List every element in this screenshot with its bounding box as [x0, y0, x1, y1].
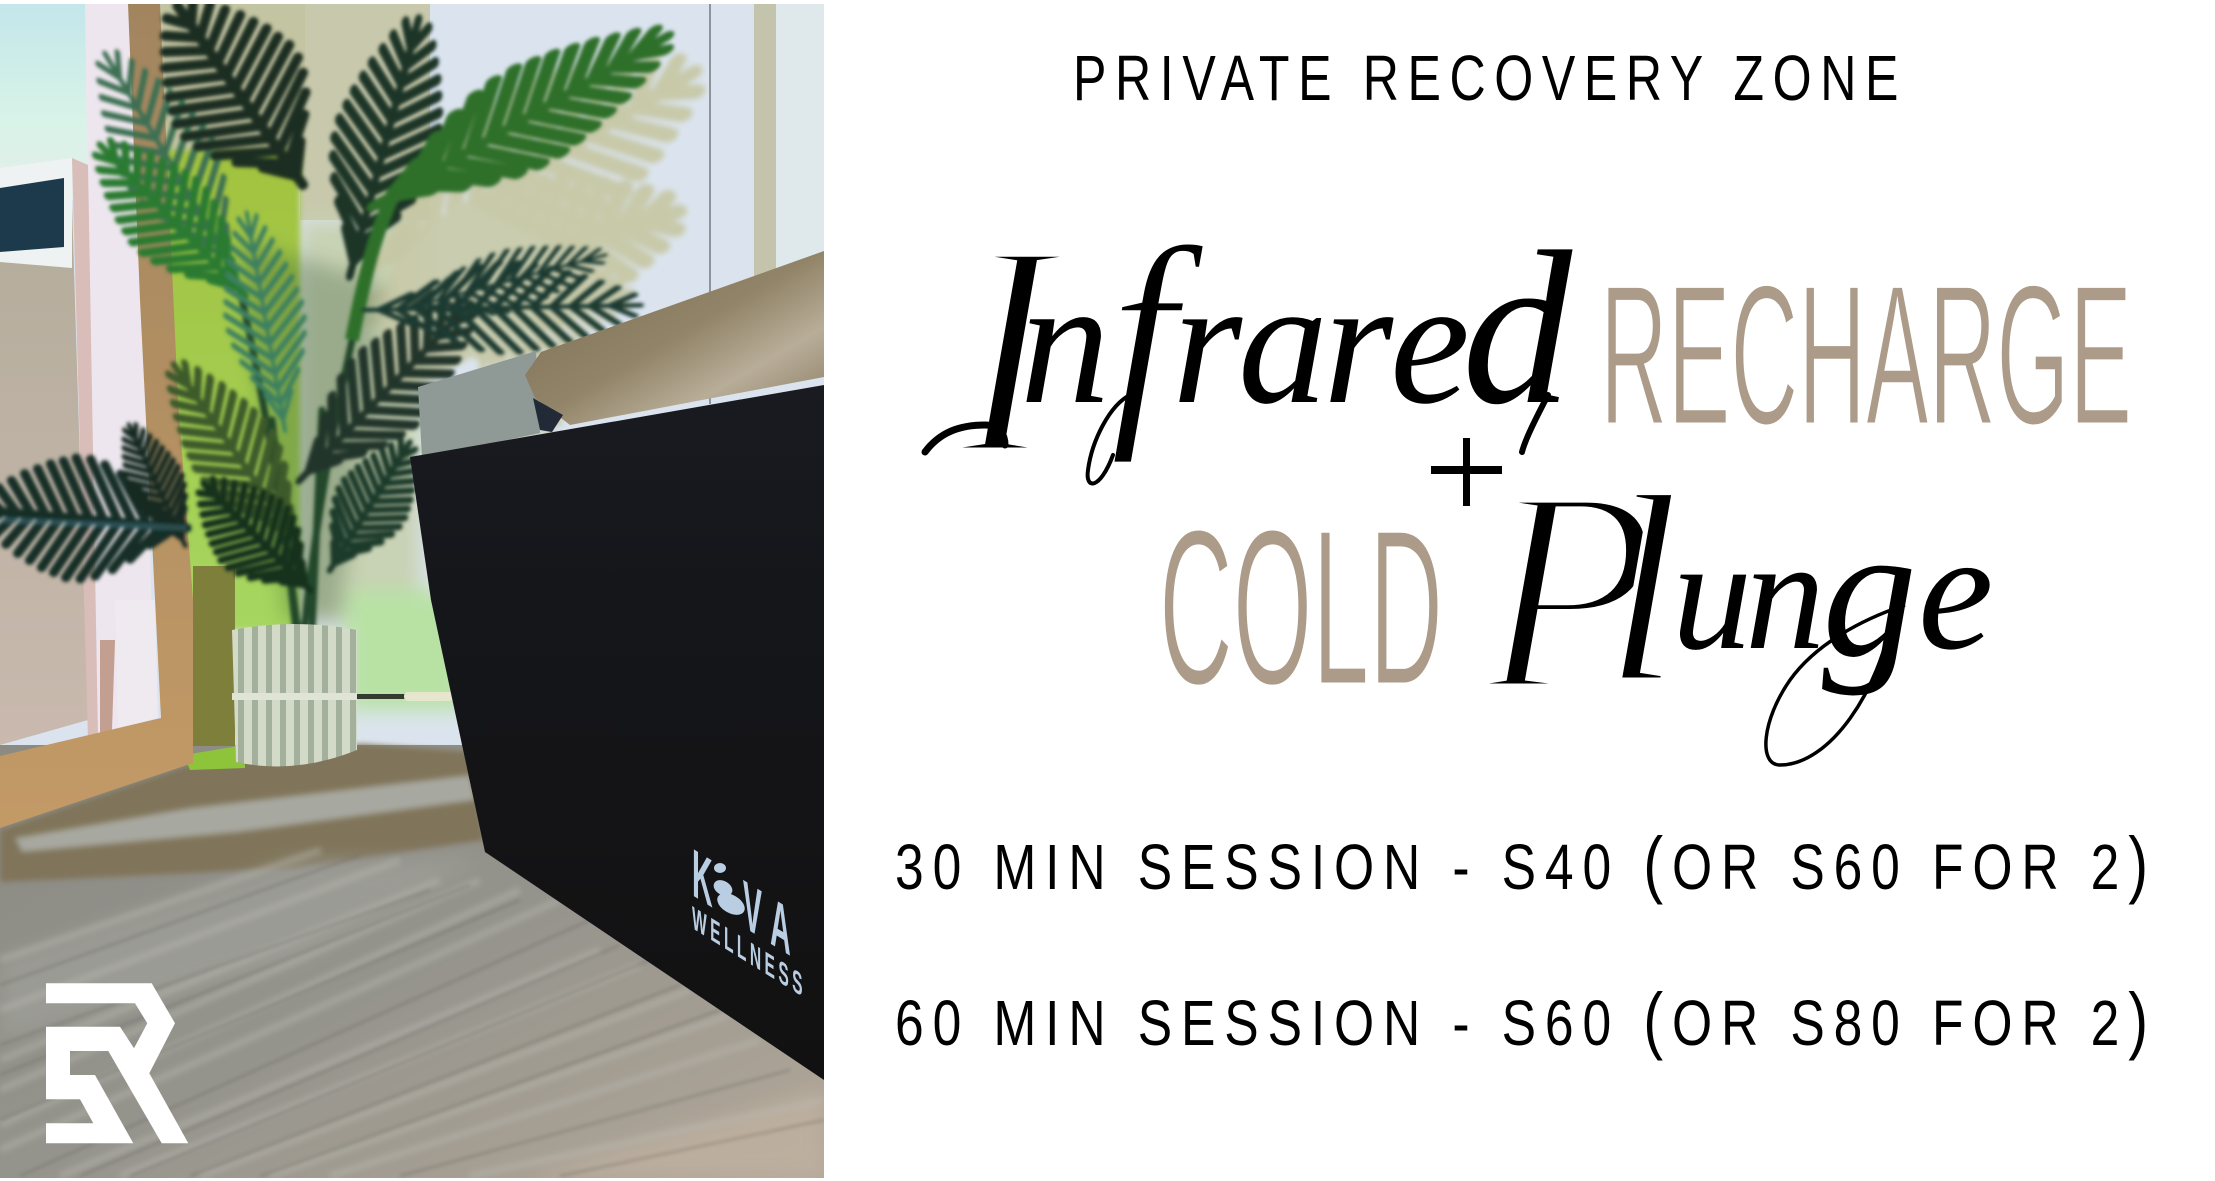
photo: wall cable	[356, 692, 454, 701]
text: Kova letters: K	[692, 834, 713, 923]
photo: black plunge tub	[410, 385, 824, 1080]
text: Kova letters: V	[743, 866, 762, 954]
script word: Infrared: n	[1020, 242, 1110, 441]
photo: foliage shade behind palm	[240, 240, 381, 620]
script word: Plunge: P	[1475, 430, 1657, 751]
photo: striped planter pot	[232, 624, 357, 766]
decorative swash below Plunge	[1766, 605, 1905, 765]
photo: tan cushion	[525, 251, 824, 432]
photo: wooden post and frame	[0, 4, 193, 828]
plus sign	[1431, 438, 1502, 506]
title block: Infrared Recharge + Cold Plunge: COLD	[1159, 484, 1443, 732]
script word: Infrared: d	[1462, 206, 1573, 450]
photo: window frame at left	[0, 4, 158, 745]
logo: Kova Wellness on tub	[692, 849, 802, 994]
logo: white SR monogram	[46, 983, 188, 1143]
decorative swashes on Infrared	[925, 395, 1548, 484]
script word: Infrared: e	[1390, 242, 1470, 441]
photo: back wall	[0, 0, 824, 780]
script word: Infrared: a	[1238, 242, 1328, 441]
photo: wooden stand behind pot	[193, 566, 235, 746]
photo: floor	[0, 744, 824, 1178]
script word: Plunge: l	[1605, 440, 1680, 739]
text: Kova letters: A	[770, 882, 791, 971]
icon: stacked stones	[714, 863, 745, 915]
photo: grey cushion	[418, 351, 540, 458]
script word: Plunge: n	[1745, 505, 1825, 683]
photo: palm plant	[0, 0, 690, 630]
pricing line: 30 minute session: 30 MIN SESSION - S40 (OR S60 FOR 2)	[895, 822, 2157, 905]
title block: Infrared Recharge + Cold Plunge	[925, 180, 2132, 765]
panel: photo of cold plunge tub and palm	[0, 0, 824, 1178]
script word: Plunge: u	[1672, 505, 1752, 683]
pricing line: 60 minute session: 60 MIN SESSION - S60 (OR S80 FOR 2)	[895, 978, 2157, 1061]
panel: photo of cold plunge tub and palm: WELLNESS	[692, 900, 806, 1006]
script word: Infrared: r	[1323, 242, 1394, 441]
script word: Infrared: r	[1172, 242, 1243, 441]
script word: Plunge: g	[1822, 487, 1917, 697]
script word: Plunge: e	[1918, 497, 1993, 685]
script word: Infrared: f	[1110, 198, 1205, 464]
script word: Infrared: I	[950, 180, 1069, 518]
heading: private recovery zone: PRIVATE RECOVERY ZONE	[1073, 42, 1907, 114]
photo: palm shadow on wall	[368, 50, 708, 441]
